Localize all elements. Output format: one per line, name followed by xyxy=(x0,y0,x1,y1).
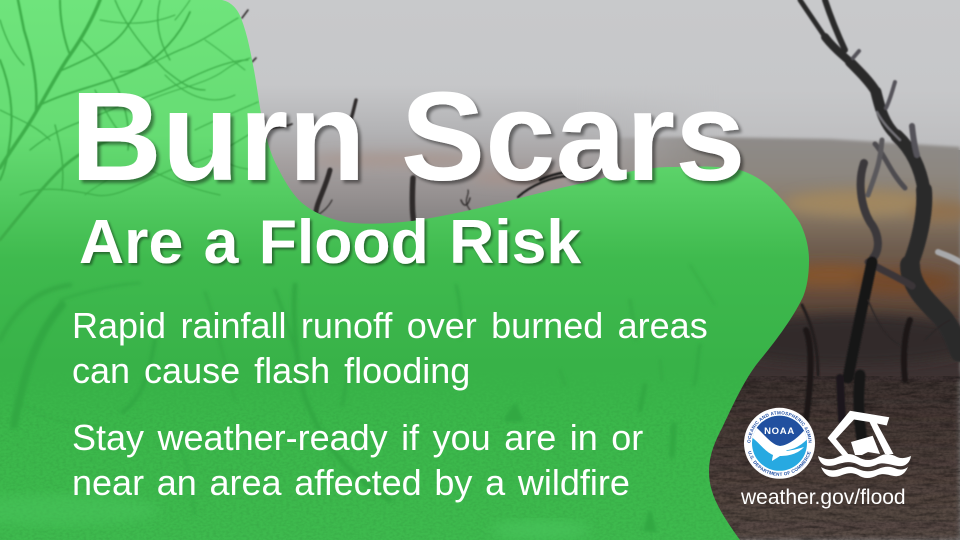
icon: NOAA logo: NATIONAL OCEANIC AND ATMOSPHERIC ADMINISTRATION xyxy=(747,411,812,443)
text block: stay weather-ready message: Stay weather-ready if you are in or xyxy=(72,417,643,458)
text block: stay weather-ready message xyxy=(72,417,643,503)
url label: weather.gov/flood xyxy=(740,486,906,509)
icon: NOAA logo: NOAA xyxy=(764,426,795,437)
background photo: burned forest in fog xyxy=(222,0,960,540)
icon: NOAA logo: U.S. DEPARTMENT OF COMMERCE xyxy=(748,450,811,476)
subtitle: Are a Flood Risk: Are a Flood Risk xyxy=(79,207,581,277)
title: Burn Scars: Burn Scars xyxy=(70,65,745,207)
foreground burned tree, right xyxy=(800,0,960,440)
text block: stay weather-ready message: near an area affected by a wildfire xyxy=(72,462,630,503)
icon: NOAA logo xyxy=(744,408,815,479)
icon: flooded house xyxy=(818,411,911,478)
background trees in the mist xyxy=(242,10,600,222)
tinted tree branches xyxy=(0,0,262,240)
text block: rainfall runoff message: Rapid rainfall runoff over burned areas xyxy=(72,305,708,346)
text block: rainfall runoff message xyxy=(72,305,708,391)
text block: rainfall runoff message: can cause flash flooding xyxy=(72,350,470,391)
